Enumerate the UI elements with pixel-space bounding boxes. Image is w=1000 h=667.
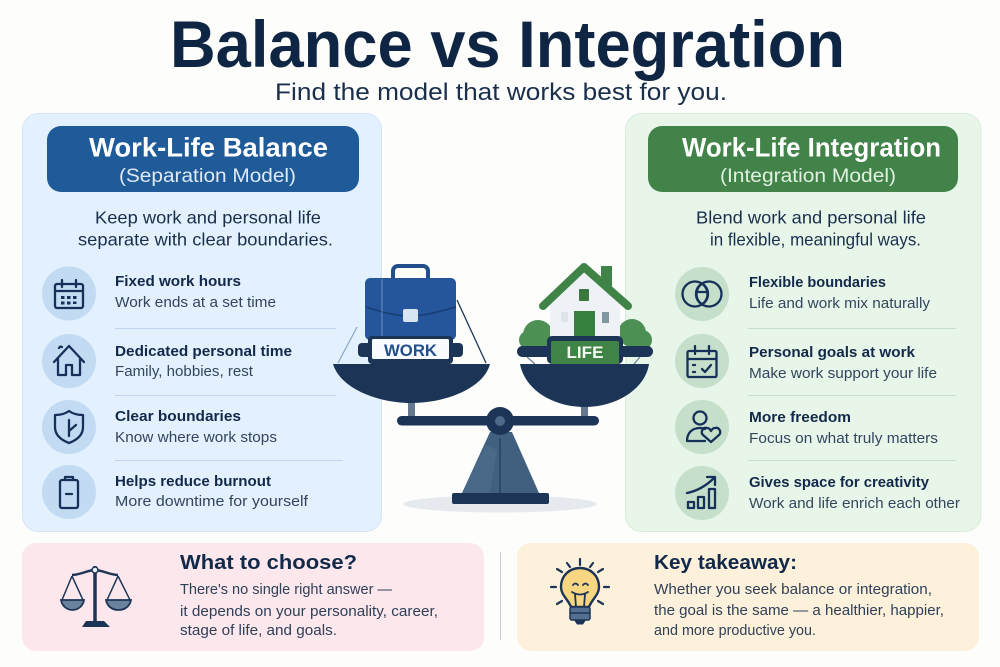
item: gives space for creativity: Work and life enrich each other [749,496,960,512]
choose text: it depends on your personality, career, [180,604,438,620]
icon: justice scales [61,566,131,627]
item: more freedom: Focus on what truly matters [749,431,938,447]
integration description: in flexible, meaningful ways. [710,230,921,250]
item: fixed work hours: Fixed work hours [115,274,241,290]
integration description [696,208,926,250]
item: flexible boundaries [675,267,931,321]
panel: what to choose [22,543,484,651]
item: more freedom: More freedom [749,410,851,426]
takeaway text: the goal is the same — a healthier, happier, [654,603,944,619]
item: helps reduce burnout: Helps reduce burnout [115,474,271,490]
panel header: balance: Work-Life Balance [89,132,328,162]
item: clear boundaries: Know where work stops [115,430,277,446]
scale beam [397,416,599,426]
balance description [78,208,333,250]
work label: WORK [384,342,437,360]
item: clear boundaries: Clear boundaries [115,409,241,425]
choose text: stage of life, and goals. [180,623,337,639]
panel header: balance: (Separation Model) [119,166,296,187]
icon: smiling light bulb [551,559,609,624]
choose text [180,582,438,639]
balance description: separate with clear boundaries. [78,230,333,250]
takeaway text: and more productive you. [654,623,816,639]
icon: house [519,266,652,350]
panel: key takeaway [517,543,979,651]
panel: key takeaway: Key takeaway: [654,551,797,574]
panel header: integration [648,126,958,192]
item: more freedom [675,400,938,454]
item: dedicated personal time: Family, hobbies, rest [115,364,253,380]
title: Balance vs Integration [170,7,845,81]
panel: work-life balance [22,114,382,532]
subtitle: Find the model that works best for you. [275,79,727,106]
life label [517,336,653,364]
scale stand [452,432,549,504]
item: helps reduce burnout [42,465,309,519]
item: gives space for creativity [675,466,960,520]
item: clear boundaries [42,400,277,454]
right scale pan [520,364,649,407]
panel header: balance [47,126,359,192]
item: helps reduce burnout: More downtime for yourself [115,494,309,510]
panel header: integration: (Integration Model) [720,166,896,187]
icon: briefcase [365,266,456,340]
panel: work-life integration [626,114,981,532]
life label: LIFE [566,343,604,362]
illustration: balance scale with work and life [333,266,653,512]
item: fixed work hours [42,266,276,320]
panel header: integration: Work-Life Integration [682,132,941,162]
takeaway text [654,582,944,639]
item: dedicated personal time: Dedicated personal time [115,344,292,360]
item: personal goals at work: Personal goals at work [749,345,916,361]
left scale pan [333,364,490,403]
scale strings [457,300,486,363]
takeaway text: Whether you seek balance or integration, [654,582,932,598]
item: personal goals at work: Make work support your life [749,366,937,382]
work label [358,336,463,364]
item: flexible boundaries: Flexible boundaries [749,275,886,291]
item: fixed work hours: Work ends at a set time [115,295,276,311]
item: flexible boundaries: Life and work mix naturally [749,296,931,312]
choose text: There's no single right answer — [180,582,392,598]
scale stems [408,402,588,417]
item: personal goals at work [675,334,937,388]
panel: what to choose: What to choose? [180,551,357,574]
item: dedicated personal time [42,334,292,388]
ground shadow [403,496,597,512]
item: gives space for creativity: Gives space for creativity [749,475,929,491]
balance description: Keep work and personal life [95,208,321,228]
scale pivot [486,407,514,435]
integration description: Blend work and personal life [696,208,926,228]
